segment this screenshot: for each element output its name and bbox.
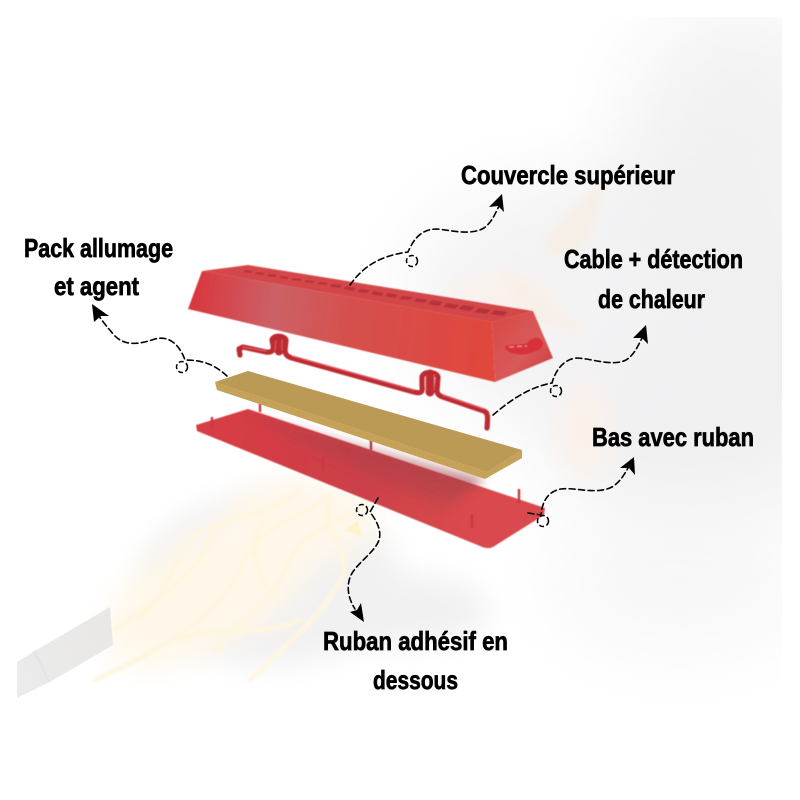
arrow head <box>92 304 109 322</box>
cover slots <box>243 270 508 316</box>
arrow head <box>489 194 504 212</box>
callout: couvercle <box>350 160 675 285</box>
cover front face <box>188 271 495 382</box>
label: Couvercle supérieur <box>461 160 675 190</box>
cover end face <box>492 311 553 382</box>
wooden pack <box>215 371 522 479</box>
leader line <box>99 316 227 376</box>
leader line <box>528 468 628 515</box>
plate and board <box>196 371 545 548</box>
flames <box>79 180 609 698</box>
callout: pack <box>24 233 227 376</box>
bottom plate <box>196 403 545 548</box>
pack front face <box>215 382 522 479</box>
label: Pack allumage <box>24 233 173 263</box>
top cover <box>188 265 553 382</box>
arrow head <box>620 457 635 475</box>
callout: ruban <box>323 498 508 695</box>
label: Cable + détection <box>564 244 743 274</box>
smoke <box>166 30 782 662</box>
marker ring <box>356 504 368 516</box>
callout: ruban: dessous <box>373 665 458 695</box>
marker ring <box>176 362 188 372</box>
pack top face <box>215 371 522 472</box>
leader line <box>493 338 642 415</box>
leader line <box>350 206 499 285</box>
leader line <box>348 498 380 609</box>
arrow head <box>633 325 648 344</box>
cover top face <box>202 265 533 322</box>
arrow head <box>350 603 364 622</box>
callout: cable <box>493 244 743 415</box>
callout: pack: et agent <box>54 271 139 301</box>
heat detection cable <box>239 336 488 428</box>
plate surface <box>196 409 545 548</box>
fire stick handle <box>17 607 113 698</box>
marker ring <box>550 386 562 396</box>
marker ring <box>538 516 548 526</box>
label: Ruban adhésif en <box>323 626 508 656</box>
plate shadow <box>240 412 485 510</box>
callout: cable: de chaleur <box>598 284 705 314</box>
marker ring <box>406 256 418 266</box>
cover side handle <box>505 338 543 355</box>
plate pins <box>212 403 519 528</box>
label: Bas avec ruban <box>592 422 754 452</box>
callout: bas <box>528 422 754 526</box>
